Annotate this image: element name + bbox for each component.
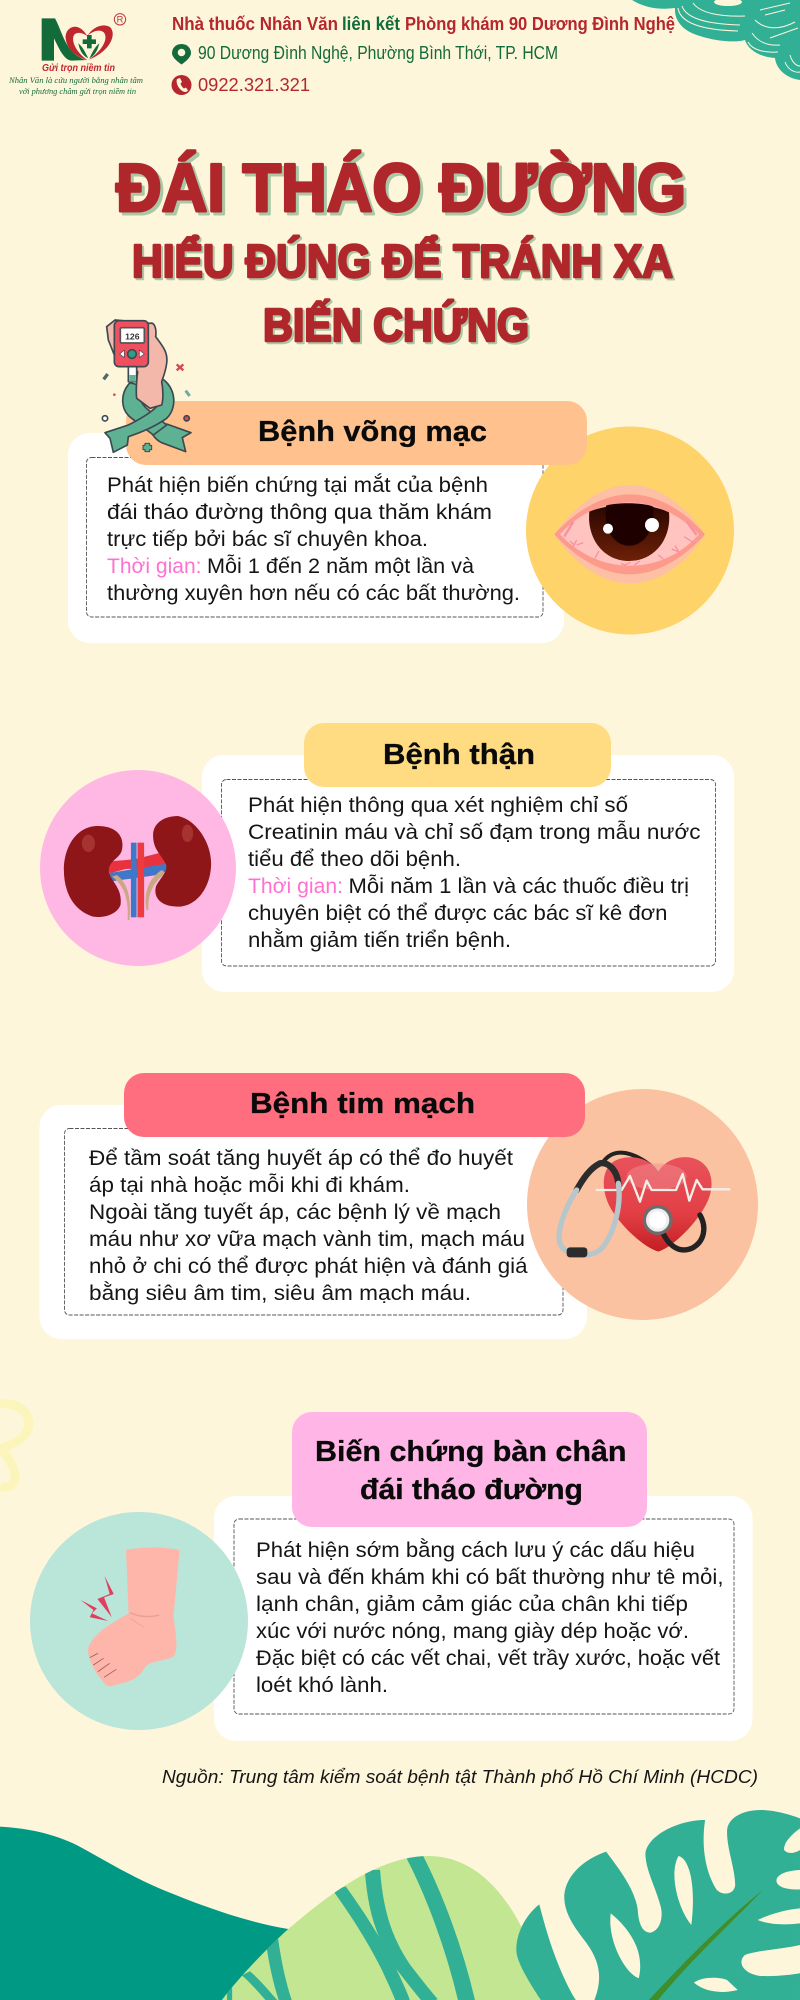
- title: BIẾN CHỨNG: [265, 301, 531, 353]
- address: 90 Dương Đình Nghệ, Phường Bình Thới, TP. HCM: [198, 42, 558, 63]
- icon: heart with stethoscope: [559, 1153, 729, 1257]
- heading pill: cardiovascular: Bệnh tim mạch: [250, 1088, 475, 1120]
- kidney text: Mỗi năm 1 lần và các thuốc điều trị: [348, 873, 689, 898]
- retinopathy text: [107, 472, 520, 605]
- logo: với phương châm gửi trọn niềm tin: [19, 86, 136, 96]
- diabetic foot text: Đặc biệt có các vết chai, vết trầy xước, hoặc vết: [256, 1646, 720, 1670]
- logo: Nhân Văn là cứu người bằng nhân tâm: [8, 75, 143, 85]
- icon: kidneys: [64, 816, 211, 920]
- heading pill: diabetic foot: đái tháo đường: [360, 1474, 583, 1506]
- panel: retinopathy: [68, 401, 734, 643]
- diabetic foot text: loét khó lành.: [256, 1673, 388, 1697]
- panel: cardiovascular: [40, 1073, 758, 1339]
- cardiovascular text: Ngoài tăng tuyết áp, các bệnh lý về mạch: [89, 1200, 501, 1224]
- retinopathy text: Phát hiện biến chứng tại mắt của bệnh: [107, 472, 488, 497]
- retinopathy text: đái tháo đường thông qua thăm khám: [107, 500, 492, 524]
- icon: foot with pain marks: [81, 1547, 180, 1686]
- title: ĐÁI THÁO ĐƯỜNG: [119, 153, 689, 229]
- source note: Nguồn: Trung tâm kiểm soát bệnh tật Thành phố Hồ Chí Minh (HCDC): [162, 1767, 758, 1787]
- retinopathy text: trực tiếp bởi bác sĩ chuyên khoa.: [107, 527, 428, 551]
- clinic name: Phòng khám 90 Dương Đình Nghệ: [405, 13, 675, 34]
- title: ĐÁI THÁO ĐƯỜNG: [116, 150, 686, 226]
- heading pill: diabetic foot: [292, 1412, 647, 1527]
- decoration: bottom foliage: [0, 1810, 800, 2000]
- heading pill: kidney: [304, 723, 611, 787]
- decoration: yellow squiggle: [0, 1404, 29, 1487]
- icon: phone: [172, 75, 192, 95]
- kidney text: Creatinin máu và chỉ số đạm trong mẫu nước: [248, 819, 701, 844]
- heading pill: retinopathy: Bệnh võng mạc: [258, 416, 487, 448]
- cardiovascular text: máu như xơ vữa mạch vành tim, mạch máu: [89, 1227, 525, 1251]
- kidney text: tiểu để theo dõi bệnh.: [248, 847, 461, 871]
- cardiovascular text: nhỏ ở chi có thể được phát hiện và đánh giá: [89, 1254, 528, 1278]
- icon: red eye: [554, 485, 705, 583]
- diabetic foot text: sau và đến khám khi có bất thường như tê mỏi,: [256, 1565, 724, 1589]
- logo: [8, 14, 143, 96]
- kidney text: chuyên biệt có thể được các bác sĩ kê đơn: [248, 901, 668, 925]
- heading pill: retinopathy: [126, 401, 587, 465]
- heading pill: kidney: Bệnh thận: [383, 739, 535, 771]
- heading pill: cardiovascular: [124, 1073, 585, 1137]
- diabetic foot text: [256, 1537, 724, 1697]
- title: [116, 150, 689, 353]
- title: HIỂU ĐÚNG ĐỂ TRÁNH XA: [134, 237, 675, 289]
- kidney text: nhằm giảm tiến triển bệnh.: [248, 927, 511, 952]
- retinopathy text: Mỗi 1 đến 2 năm một lần và: [207, 553, 474, 578]
- cardiovascular text: áp tại nhà hoặc mỗi khi đi khám.: [89, 1172, 410, 1197]
- icon: location pin: [172, 44, 191, 64]
- decoration: top right brush swirl: [632, 0, 800, 80]
- kidney text: [248, 793, 701, 952]
- cardiovascular text: Để tầm soát tăng huyết áp có thể đo huyết: [89, 1146, 513, 1170]
- panel: kidney disease: [40, 723, 734, 992]
- clinic name: [172, 13, 675, 34]
- diabetic foot text: xúc với nước nóng, mang giày dép hoặc vớ.: [256, 1619, 689, 1643]
- kidney text: Phát hiện thông qua xét nghiệm chỉ số: [248, 793, 628, 817]
- foot circle: [30, 1512, 248, 1730]
- logo: Gửi trọn niềm tin: [42, 62, 115, 74]
- diabetic foot text: Phát hiện sớm bằng cách lưu ý các dấu hiệu: [256, 1537, 695, 1562]
- phone number: 0922.321.321: [198, 74, 310, 95]
- cardiovascular text: bằng siêu âm tim, siêu âm mạch máu.: [89, 1280, 471, 1305]
- cardiovascular text: [89, 1146, 528, 1305]
- logo: R: [117, 15, 124, 25]
- panel: diabetic foot: [30, 1412, 752, 1741]
- kidney text: Thời gian:: [248, 874, 343, 898]
- illustration: glucose meter hand and ribbon: 126: [125, 331, 140, 341]
- clinic name: Nhà thuốc Nhân Văn: [172, 13, 338, 34]
- retinopathy text: Thời gian:: [107, 554, 202, 578]
- kidney circle: [40, 770, 236, 966]
- clinic name: liên kết: [342, 13, 400, 34]
- title: BIẾN CHỨNG: [263, 299, 529, 351]
- diabetic foot text: lạnh chân, giảm cảm giác của chân khi tiếp: [256, 1592, 688, 1616]
- illustration: glucose meter hand and ribbon: [102, 320, 191, 452]
- eye circle: [526, 426, 734, 634]
- heart circle: [527, 1089, 758, 1320]
- retinopathy text: thường xuyên hơn nếu có các bất thường.: [107, 581, 520, 605]
- title: HIỂU ĐÚNG ĐỂ TRÁNH XA: [132, 235, 673, 287]
- heading pill: diabetic foot: Biến chứng bàn chân: [315, 1436, 626, 1468]
